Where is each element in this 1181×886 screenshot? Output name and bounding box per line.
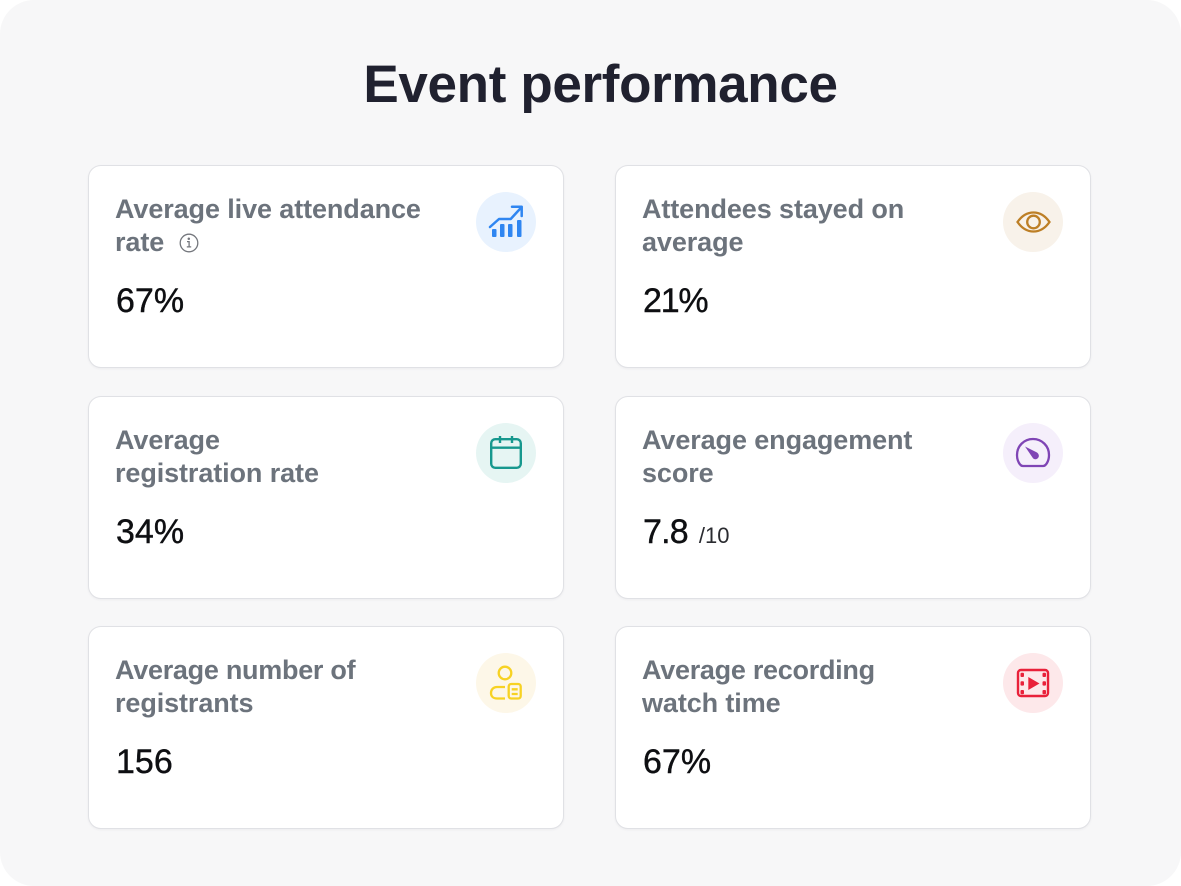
label: attendees stayed on average — [642, 194, 904, 257]
label: average number of registrants: registrants — [115, 688, 253, 718]
label: average recording watch time: watch time — [642, 688, 781, 718]
icon: eye — [1003, 192, 1063, 252]
label: attendees stayed on average: average — [642, 227, 743, 257]
panel: average number of registrants — [88, 626, 564, 829]
title: Event performance — [363, 55, 838, 114]
panel: average engagement score — [615, 396, 1091, 599]
label: average engagement score: Average engagement — [642, 425, 912, 455]
value: 67%: 67% — [116, 282, 184, 320]
icon: calendar — [476, 423, 536, 483]
panel: average registration rate — [88, 396, 564, 599]
panel: average recording watch time — [615, 626, 1091, 829]
icon: registrant — [476, 653, 536, 713]
label: average registration rate: Average — [115, 425, 220, 455]
icon: growth chart — [476, 192, 536, 252]
value: 21%: 21% — [643, 282, 707, 320]
label: average registration rate — [115, 425, 319, 488]
panel: attendees stayed on average — [615, 165, 1091, 368]
label: average live attendance rate: rate — [115, 227, 164, 257]
icon: info — [180, 234, 198, 252]
icon: video — [1003, 653, 1063, 713]
value: 7.8 /10: 7.8 /10 — [643, 512, 729, 550]
label: average engagement score: score — [642, 458, 714, 488]
label: attendees stayed on average: Attendees stayed on — [642, 194, 904, 224]
label: average number of registrants — [115, 655, 356, 718]
label: average registration rate: registration rate — [115, 458, 319, 488]
value: 67%: 67% — [643, 742, 711, 780]
value: 156: 156 — [116, 742, 173, 780]
value: 34%: 34% — [116, 512, 184, 550]
label: average number of registrants: Average number of — [115, 655, 355, 685]
panel: average live attendance rate — [88, 165, 564, 368]
label: average recording watch time: Average recording — [642, 655, 875, 685]
icon: gauge — [1003, 423, 1063, 483]
label: average recording watch time — [642, 655, 875, 718]
label: average live attendance rate: Average live attendance — [115, 194, 421, 224]
label: average live attendance rate — [115, 194, 421, 257]
label: average engagement score — [642, 425, 912, 488]
